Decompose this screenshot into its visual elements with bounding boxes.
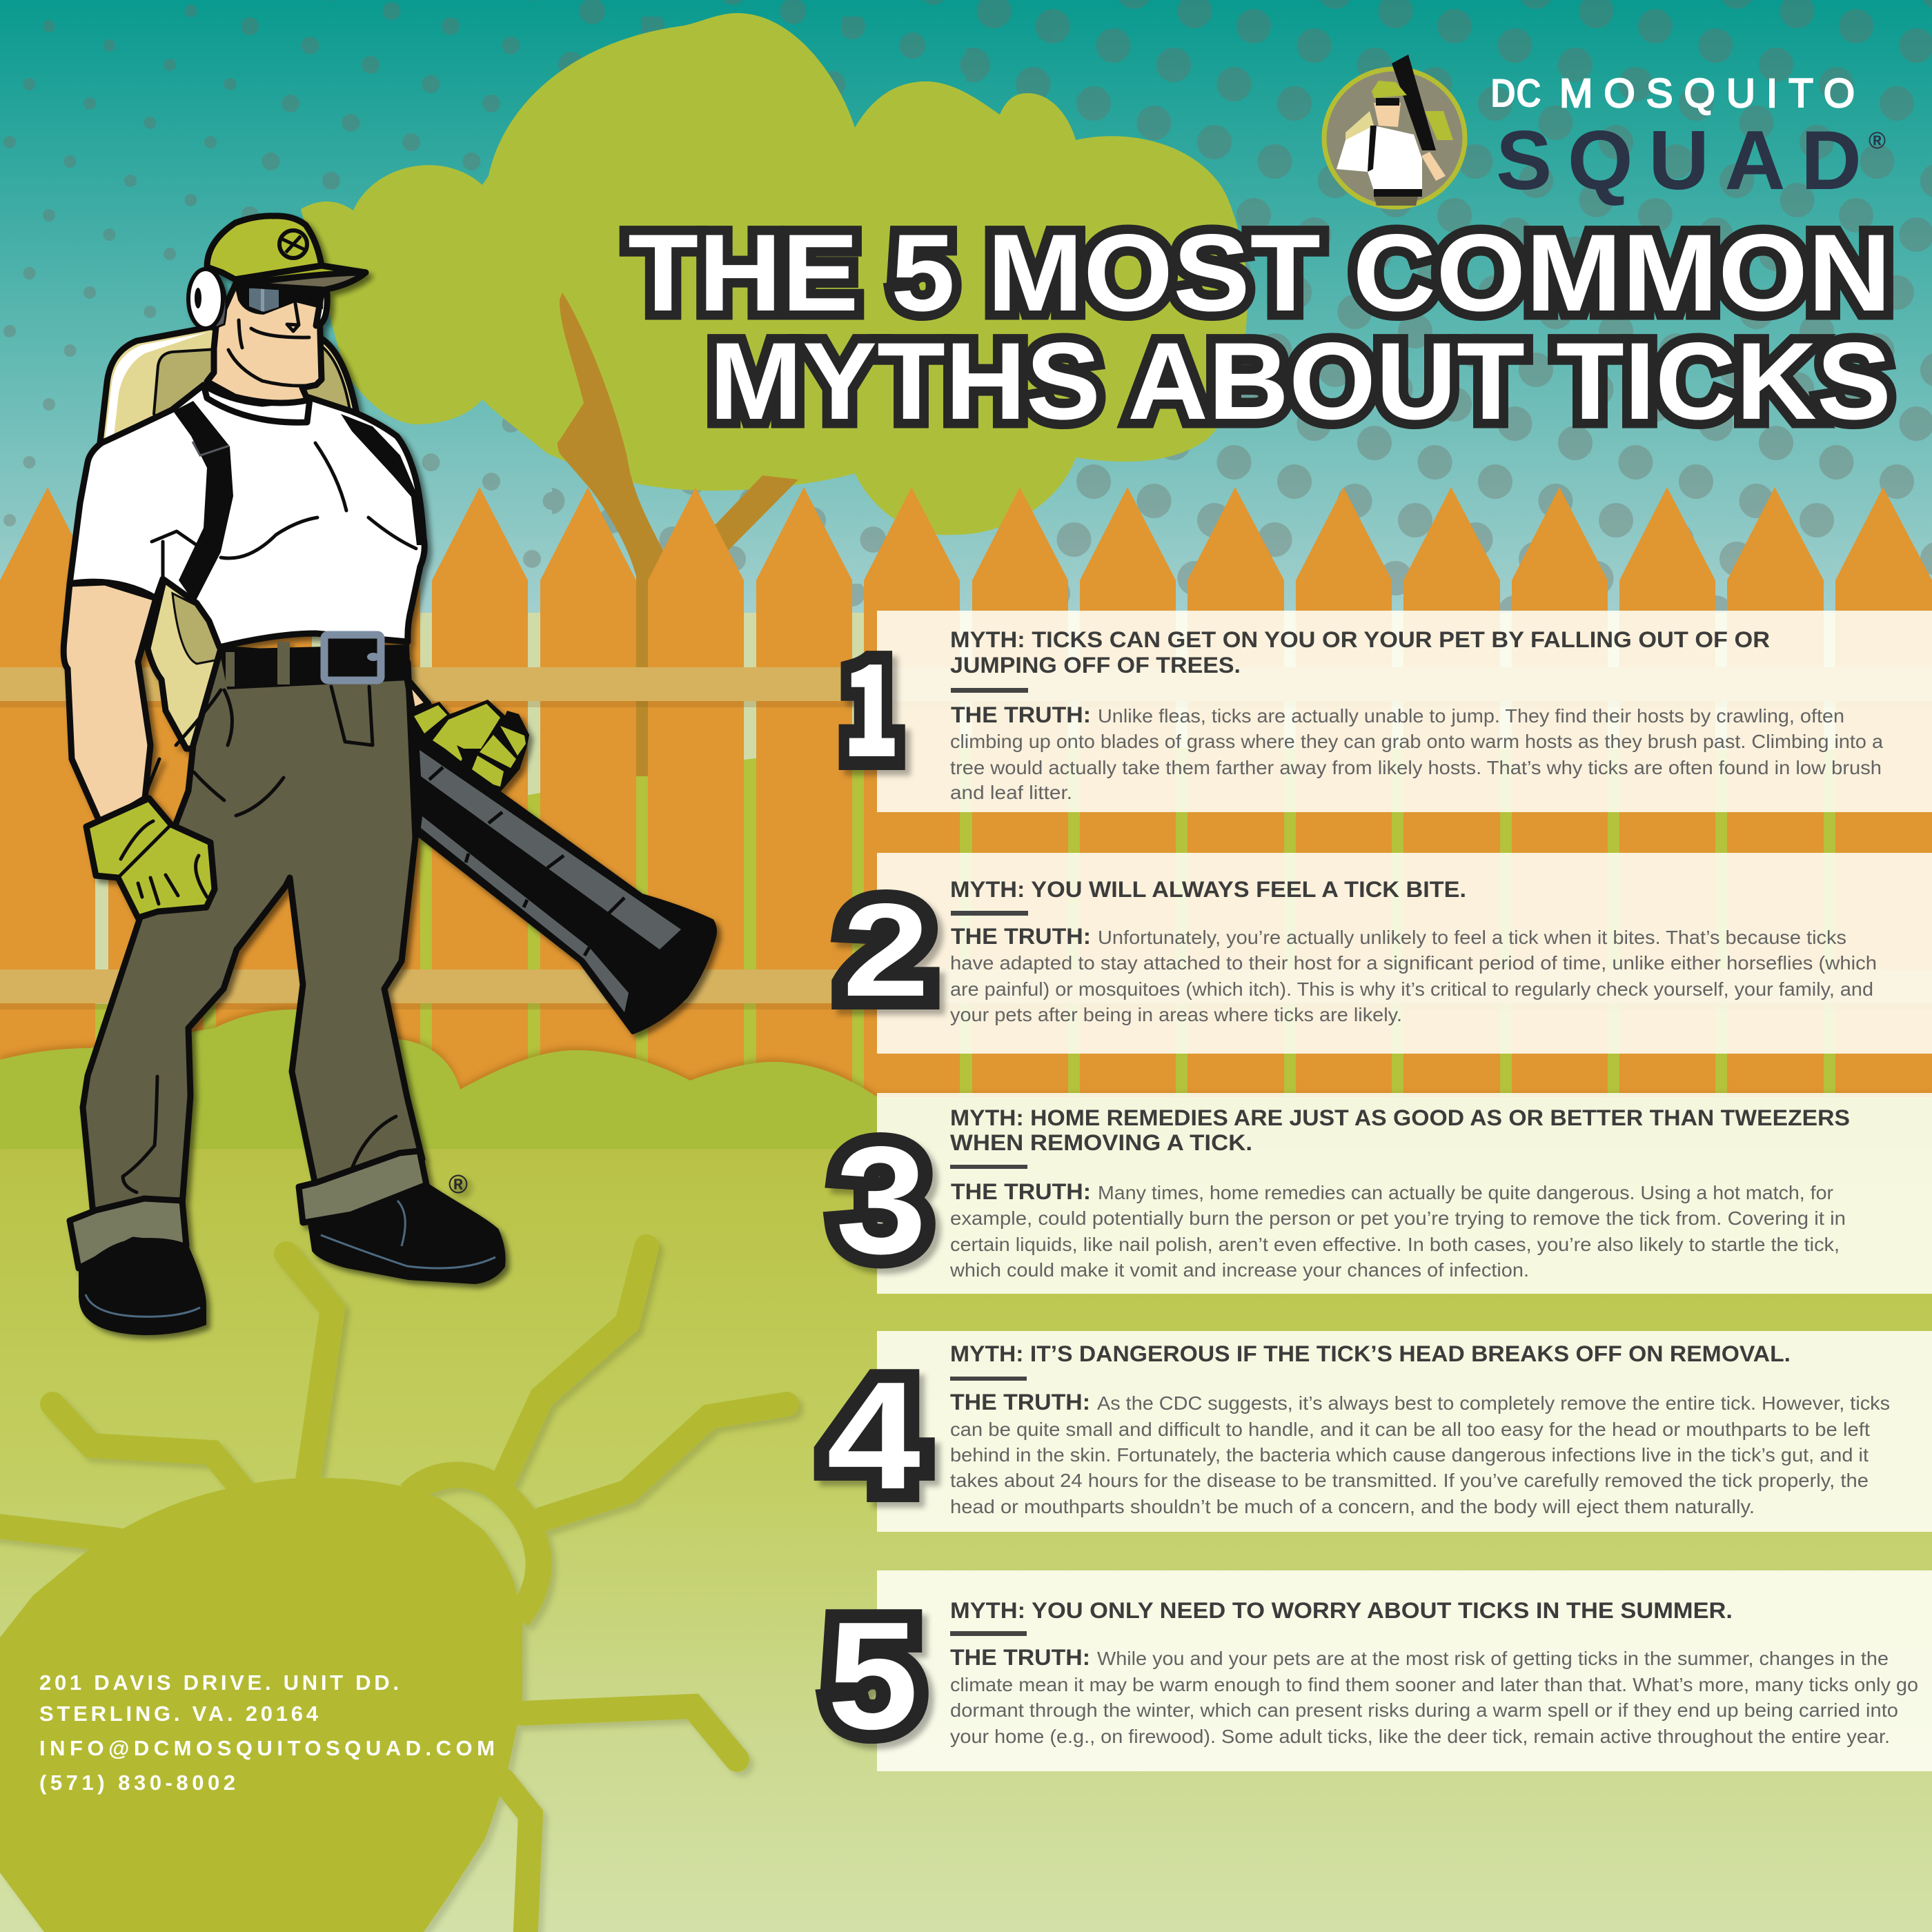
divider: [950, 1631, 1027, 1636]
panel: myth 3: [877, 1093, 1932, 1294]
right boot: [310, 1185, 504, 1282]
truth text: are painful) or mosquitoes (which itch). This is why it’s critical to regularly check yourself, your family, and: [950, 978, 1873, 1000]
truth text: As the CDC suggests, it’s always best to completely remove the entire tick. However, ticks: [1097, 1392, 1890, 1414]
myth heading: MYTH: HOME REMEDIES ARE JUST AS GOOD AS OR BETTER THAN TWEEZERS: [950, 1105, 1850, 1130]
tick legs: [0, 1247, 787, 1932]
ear muff: [188, 269, 226, 328]
facial lines: [228, 304, 316, 386]
myth numbers: [827, 610, 929, 1762]
trouser creases: [123, 687, 396, 1192]
email: INFO@DCMOSQUITOSQUAD.COM: [39, 1736, 495, 1760]
right cuff: [299, 1151, 426, 1223]
truth text: head or mouthparts shouldn’t be much of a concern, and the body will eject them naturally.: [950, 1496, 1755, 1517]
backpack: [99, 327, 357, 483]
truth text: certain liquids, like nail polish, aren’t even effective. In both cases, you’re also likely to startle the tick,: [950, 1234, 1840, 1255]
title: [628, 211, 1891, 442]
truth text: which could make it vomit and increase your chances of infection.: [949, 1259, 1529, 1281]
myth heading: MYTH: TICKS CAN GET ON YOU OR YOUR PET BY FALLING OUT OF OR: [950, 627, 1770, 652]
fence rails: [0, 667, 1932, 1009]
myth heading: JUMPING OFF OF TREES.: [950, 653, 1241, 678]
fence pickets: [0, 487, 1932, 1104]
tree: [301, 13, 1248, 776]
right glove: [413, 700, 529, 792]
lower pack pouch: [148, 573, 235, 749]
divider: [951, 911, 1028, 916]
shirt folds: [152, 443, 416, 580]
truth text: your home (e.g., on firewood). Some adult ticks, like the deer tick, remain active throughout the entire year.: [950, 1726, 1890, 1747]
myth heading: [950, 627, 1770, 678]
panel: myth 1: [877, 611, 1932, 812]
logo: DC Mosquito Squad: [1324, 55, 1886, 207]
truth text: Unfortunately, you’re actually unlikely to feel a tick when it bites. That’s because ticks: [1098, 927, 1846, 948]
panel: myth 5: [877, 1570, 1932, 1771]
truth text: [949, 1179, 1846, 1281]
belt: [221, 642, 409, 688]
truth text: dormant through the winter, which can present risks during a warm spell or if they end up being carried into: [950, 1699, 1898, 1721]
logo wordmark: Squad: SQUAD: [1496, 113, 1862, 207]
number 5: 5: [827, 1590, 918, 1762]
number 2: 2: [842, 876, 929, 1024]
panel: myth 2: [877, 853, 1932, 1054]
registered mark: ®: [448, 1170, 468, 1199]
phone: (571) 830-8002: [39, 1771, 235, 1795]
truth text: can be quite small and difficult to handle, and it can be all too easy for the head or mouthparts to be left: [950, 1419, 1870, 1440]
truth text: While you and your pets are at the most risk of getting ticks in the summer, changes in the: [1097, 1648, 1889, 1669]
pale backdrop behind the fence: [0, 613, 1932, 1179]
tree trunk: [558, 293, 798, 776]
cap: [207, 216, 366, 290]
truth text: tree would actually take them farther away from likely hosts. That’s why ticks are often found in low brush: [950, 757, 1882, 778]
tree canopy: [301, 13, 1248, 535]
truth text: climate mean it may be warm enough to find them sooner and later than that. What’s more, many ticks only go: [950, 1674, 1918, 1695]
giant tick silhouette: [0, 1247, 787, 1932]
logo wordmark: Mosquito: MOSQUITO: [1559, 71, 1855, 116]
registered mark: ®: [1869, 128, 1886, 154]
tick body: [0, 1478, 522, 1932]
myth heading: MYTH: YOU ONLY NEED TO WORRY ABOUT TICKS IN THE SUMMER.: [950, 1598, 1733, 1623]
truth text: behind in the skin. Fortunately, the bacteria which cause dangerous infections live in the tick’s gut, and it: [950, 1444, 1869, 1466]
sky background: [0, 0, 1932, 621]
myth heading: WHEN REMOVING A TICK.: [950, 1130, 1252, 1155]
trousers: [83, 649, 422, 1221]
panel background: [877, 1331, 1932, 1532]
truth text: THE TRUTH:: [951, 1179, 1091, 1204]
truth text: THE TRUTH:: [951, 702, 1091, 727]
number 3: 3: [836, 1115, 927, 1286]
truth text: takes about 24 hours for the disease to be transmitted. If you’ve carefully removed the tick properly, the: [950, 1470, 1869, 1491]
truth text: your pets after being in areas where ticks are likely.: [950, 1004, 1402, 1025]
olive backdrop behind the fence: [0, 747, 1932, 1173]
left boot: [81, 1240, 204, 1333]
truth text: Many times, home remedies can actually be quite dangerous. Using a hot match, for: [1098, 1182, 1833, 1203]
truth text: THE TRUTH:: [950, 1645, 1090, 1670]
title line 2: MYTHS ABOUT TICKS: [709, 319, 1891, 442]
truth text: [950, 924, 1877, 1025]
myth heading: [950, 1105, 1850, 1155]
panel background: [877, 853, 1932, 1054]
truth text: THE TRUTH:: [950, 1390, 1090, 1414]
panel background: [877, 611, 1932, 812]
truth text: have adapted to stay attached to their host for a significant period of time, unlike either horseflies (which: [950, 952, 1877, 974]
divider: [950, 1165, 1027, 1169]
right forearm: [407, 679, 428, 711]
title line 1: THE 5 MOST COMMON: [628, 211, 1891, 334]
truth text: [950, 1645, 1918, 1747]
truth text: example, could potentially burn the person or pet you’re trying to remove the tick from. Covering it in: [950, 1208, 1846, 1229]
truth text: [950, 702, 1884, 803]
shirt: [70, 385, 424, 647]
collar: [204, 385, 310, 422]
number 4: 4: [827, 1350, 920, 1521]
left glove: [86, 798, 215, 918]
mascot: exterminator with leaf blower: [63, 216, 715, 1333]
address line 1: 201 DAVIS DRIVE. UNIT DD.: [39, 1670, 399, 1695]
truth text: [950, 1390, 1890, 1517]
left cuff: [70, 1199, 186, 1268]
panel background: [877, 1570, 1932, 1771]
wooden fence: [0, 487, 1932, 1104]
pouch panel: [172, 593, 222, 664]
myth heading: MYTH: IT’S DANGEROUS IF THE TICK’S HEAD BREAKS OFF ON REMOVAL.: [950, 1341, 1791, 1366]
bushes: [0, 1009, 1932, 1149]
contact details: [39, 1670, 495, 1795]
truth text: Unlike fleas, ticks are actually unable to jump. They find their hosts by crawling, often: [1098, 705, 1844, 727]
left shoulder strap: [173, 401, 233, 603]
panel: myth 4: [877, 1331, 1932, 1532]
sunglasses: [233, 273, 324, 315]
polka dot pattern: [0, 0, 1932, 621]
neck and face: [207, 282, 322, 403]
lawn: [0, 1149, 1932, 1932]
left arm: [63, 582, 156, 825]
panel background: [877, 1093, 1932, 1294]
divider: [950, 1377, 1027, 1381]
truth text: THE TRUTH:: [951, 924, 1091, 949]
leaf blower: [414, 731, 715, 1032]
far side ear cup: [316, 293, 327, 326]
tick head ring: [410, 1475, 538, 1618]
truth text: and leaf litter.: [950, 782, 1072, 803]
myth heading: MYTH: YOU WILL ALWAYS FEEL A TICK BITE.: [950, 877, 1466, 902]
address line 2: STERLING. VA. 20164: [39, 1702, 319, 1726]
truth text: climbing up onto blades of grass where they can grab onto warm hosts as they brush past. Climbing into a: [950, 731, 1884, 752]
belt buckle: [324, 635, 381, 680]
logo wordmark: DC: DC: [1490, 71, 1541, 116]
logo badge: [1324, 55, 1465, 207]
divider: [951, 688, 1028, 693]
number 1: 1: [842, 610, 900, 793]
right shoulder strap: [341, 414, 426, 545]
